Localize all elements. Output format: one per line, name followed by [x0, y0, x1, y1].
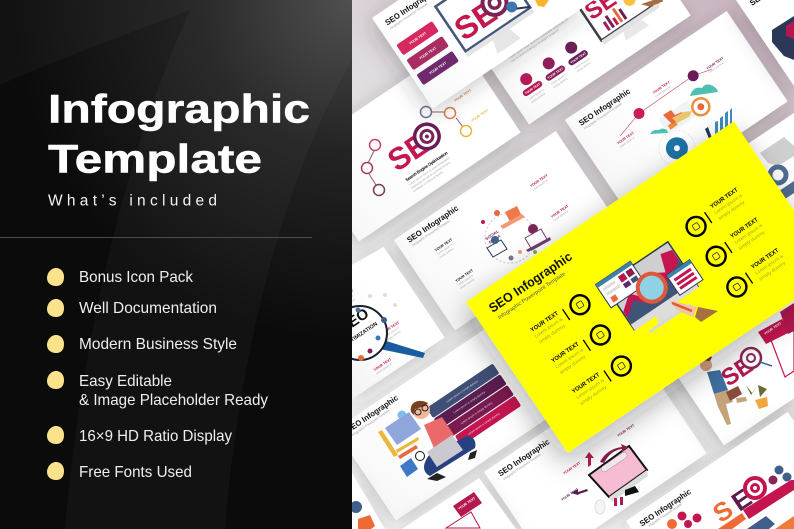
slide: search engine optimization: adipiscing elit sed do eiusmod tempor	[410, 160, 451, 190]
icon: teal clouds and bars	[650, 84, 732, 141]
slide: seo optimization magnifier: simply dummy	[385, 329, 402, 342]
slide: seo optimization magnifier: simply dummy	[340, 297, 356, 310]
slide: social media: simply dummy	[459, 277, 476, 290]
slide: seo buttons and monitor: YOUR TEXT	[408, 31, 428, 46]
bullet: bonus icon pack: Bonus Icon Pack	[79, 269, 194, 286]
slide: person walking with seo: YOUR TEXT	[763, 321, 783, 336]
bullet: easy editable	[47, 371, 268, 409]
slide: search monitor	[484, 363, 707, 529]
slide: colourful seo letters: SEO Infographic	[638, 487, 693, 528]
slide: bottom left icons	[350, 473, 385, 529]
slide: bottom left banner	[402, 478, 516, 529]
left column callouts: Lorem ipsum is	[555, 347, 585, 370]
slide: target and gear: Lorem ipsum is	[618, 135, 636, 149]
slide: search engine optimization: incididunt ut labore et dolore	[412, 170, 444, 193]
slide: right of yellow	[749, 113, 794, 310]
slide: person with laptop: Lorem ipsum is simply dummy	[460, 400, 494, 425]
slide: target and gear: YOUR TEXT	[706, 56, 725, 71]
bullet: easy editable: Easy Editable	[79, 373, 172, 390]
slide: social media: MEDIA	[488, 233, 502, 245]
slide: seo buttons and monitor: YOUR TEXT	[428, 61, 448, 76]
bullet: well documentation: Well Documentation	[79, 300, 217, 317]
right column callouts: Lorem ipsum is	[754, 253, 785, 277]
left column callouts: YOUR TEXT	[551, 341, 581, 364]
slide: circles and monitor: simply dummy	[552, 76, 569, 89]
right column callouts	[683, 187, 789, 301]
monitor illustration	[595, 233, 711, 344]
title: Infographic	[48, 88, 310, 132]
slide: search engine optimization: YOUR TEXT	[470, 108, 490, 123]
slide: target and gear: YOUR TEXT	[652, 80, 671, 95]
slide: search monitor: YOUR TEXT	[616, 423, 636, 438]
slide: colourful seo letters: E	[726, 482, 757, 517]
slide: search engine optimization: YOUR TEXT	[453, 88, 473, 103]
background: collage backdrop	[352, 0, 794, 529]
left column callouts: simply dummy	[558, 354, 588, 376]
slide: person walking with seo: SE	[716, 352, 758, 392]
slide: seo optimization magnifier: Lorem ipsum is	[375, 362, 393, 375]
slide: social media	[394, 131, 617, 330]
left column callouts: Lorem ipsum is	[575, 377, 606, 401]
slide: person with laptop: Lorem ipsum is simply dummy	[467, 411, 501, 436]
title: Template	[48, 138, 262, 182]
slide: person with laptop: Lorem ipsum is simply dummy	[452, 390, 486, 414]
right column callouts: simply dummy	[738, 229, 767, 252]
slide: person walking with seo	[663, 267, 794, 445]
slide: circles and monitor: sed do eiusmod tempor incididunt ut labore	[510, 28, 560, 63]
slide: search engine optimization: Lorem ipsum dolor sit amet consectetur	[408, 156, 451, 186]
divider	[0, 237, 312, 238]
title	[48, 88, 310, 182]
slide: person with laptop: Lorem ipsum is simply dummy	[445, 379, 479, 404]
yellow slide subtitle: Infographic Powerpoint Template	[497, 271, 567, 321]
slide: target and gear: YOUR TEXT	[616, 131, 636, 146]
left column callouts: Lorem ipsum is	[534, 316, 565, 340]
right column callouts: Lorem ipsum is	[734, 222, 764, 246]
left column callouts: YOUR TEXT	[530, 311, 560, 334]
slide: social media: YOUR TEXT	[550, 204, 570, 219]
slide: social media: simply dummy	[438, 246, 455, 259]
icon: hand holding magnifier	[669, 300, 718, 322]
feature list	[47, 268, 268, 481]
slide: search engine optimization	[298, 42, 521, 241]
right column callouts: YOUR TEXT	[750, 248, 781, 271]
slide: social media: YOUR TEXT	[434, 237, 454, 253]
right column callouts: Lorem ipsum is	[713, 193, 744, 216]
slide: target and gear: Lorem ipsum is	[654, 85, 672, 98]
slide: circles and monitor: Lorem ipsum is	[528, 87, 545, 101]
slide: seo optimization magnifier: Lorem ipsum is	[383, 325, 400, 339]
yellow slide title: SEO Infographic	[486, 249, 575, 315]
slide: social media: YOUR TEXT	[455, 268, 475, 283]
slide: target and gear	[565, 11, 788, 210]
slide: search monitor: SEO Infographic	[496, 437, 552, 478]
bullet: easy editable: & Image Placeholder Ready	[79, 392, 268, 409]
right column callouts: YOUR TEXT	[730, 217, 760, 240]
slide: social media: Lorem ipsum is	[457, 273, 474, 287]
slide: social media: Lorem ipsum is	[532, 178, 549, 192]
icon: orange block	[535, 0, 549, 7]
slide: person with laptop	[335, 321, 558, 520]
bullet: modern business style: Modern Business Style	[79, 336, 237, 353]
left column callouts	[529, 292, 636, 407]
slide: social media: SEO Infographic	[405, 203, 461, 245]
slide: circles and monitor	[468, 0, 691, 124]
slide: social media: SOCIAL	[484, 228, 500, 241]
slide: circles and monitor: YOUR TEXT	[524, 82, 541, 95]
slide: person with laptop: Infographic Powerpoint Template	[351, 409, 390, 437]
bullet: hd ratio: 16×9 HD Ratio Display	[79, 428, 232, 445]
slide: colourful seo letters: S	[707, 494, 738, 529]
slide: seo optimization magnifier: Lorem ipsum is	[337, 293, 355, 307]
bullet: free fonts	[47, 462, 192, 481]
slide: social media: Lorem ipsum is	[552, 209, 570, 222]
slide: seo optimization magnifier	[329, 247, 445, 399]
slide: search engine optimization: Search Engine Optimization	[404, 150, 449, 182]
slide: seo buttons and monitor	[372, 0, 594, 108]
bullet: free fonts: Free Fonts Used	[79, 464, 192, 481]
slide: social media: Lorem ipsum is	[436, 242, 454, 256]
slide: target and gear: Lorem ipsum is	[708, 60, 725, 74]
slide: seo optimization magnifier: EO	[345, 305, 372, 331]
slide: top right corner	[736, 0, 794, 86]
slide: seo buttons and monitor: YOUR TEXT	[418, 46, 438, 61]
slide: circles and monitor: Lorem ipsum is	[550, 72, 567, 86]
slide: social media: YOUR TEXT	[529, 173, 549, 188]
slide: search monitor: YOUR TEXT	[560, 487, 580, 502]
right column callouts: simply dummy	[758, 260, 787, 282]
slide: seo optimization magnifier: TIMIZATION	[350, 321, 379, 344]
slide: circles and monitor: simply dummy	[576, 60, 592, 73]
slide: seo optimization magnifier: YOUR TEXT	[381, 320, 401, 335]
slide: circles and monitor: Lorem ipsum is	[573, 56, 591, 70]
slide: social media: Infographic Powerpoint Template	[411, 219, 451, 247]
slide: search monitor: YOUR TEXT	[562, 460, 582, 475]
slide: circles and monitor: simply dummy	[530, 91, 546, 104]
left column callouts: simply dummy	[579, 384, 608, 407]
left column callouts: simply dummy	[538, 323, 567, 345]
subtitle: What’s included	[48, 192, 217, 210]
right column callouts: YOUR TEXT	[710, 187, 740, 210]
panel: dark left sidebar	[0, 0, 352, 529]
slide: yellow highlighted seo infographic	[466, 121, 794, 453]
slide: colourful seo letters	[626, 412, 794, 529]
slide: search engine optimization: SE	[381, 126, 435, 178]
right column callouts: simply dummy	[717, 199, 747, 222]
slide: target and gear: SEO Infographic	[577, 86, 632, 128]
slide: seo optimization magnifier: YOUR TEXT	[335, 288, 355, 304]
slide: seo optimization magnifier: YOUR TEXT	[373, 357, 393, 372]
slide: circles and monitor: YOUR TEXT	[570, 51, 587, 65]
slide: target and gear: Infographic Powerpoint Template	[583, 102, 623, 130]
slide: circles and monitor: Lorem ipsum dolor sit amet consectetur adipiscing elit	[508, 17, 569, 60]
slide: search monitor: Infographic Powerpoint Template	[502, 453, 542, 481]
slide: person with laptop: SEO Infographic	[345, 393, 400, 434]
slide: colourful seo letters: Infographic Powerpoint Template	[648, 502, 683, 528]
left column callouts: YOUR TEXT	[571, 372, 601, 395]
slide: circles and monitor: YOUR TEXT	[547, 67, 564, 80]
slide: bottom left banner: YOUR TEXT	[457, 496, 477, 511]
slide: seo buttons and monitor: Infographic Powerpoint Template	[389, 2, 429, 30]
